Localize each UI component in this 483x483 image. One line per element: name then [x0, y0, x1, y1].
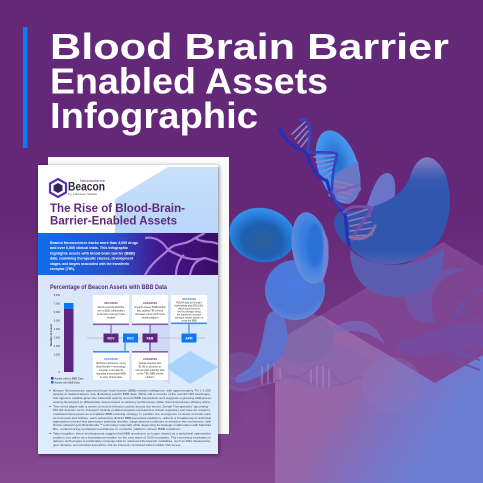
- illustration: blood cell behind DNA: [307, 125, 369, 209]
- timeline card: November top: form a $2B collaboration: [97, 310, 125, 312]
- timeline card: November top: 30/11/2025: [104, 301, 118, 305]
- timeline: [87, 323, 205, 351]
- bar chart: assets with and without BBB data: 4,000: [54, 328, 61, 331]
- report logo: Beacon: Neuroscience: [80, 179, 105, 183]
- timeline card: December bottom: program in its patients: [99, 369, 124, 372]
- back page sheet: [48, 157, 229, 434]
- report intro band: Beacon Neuroscience tracks more than 4,000 drugs: [50, 241, 138, 245]
- title: [50, 26, 449, 136]
- report key takeaways: this signal is notable given the historical opacity around BBB penetration and suggests a growing willingness: [53, 396, 211, 400]
- report intro band: data, examining therapeutic classes, development: [50, 256, 134, 260]
- left accent bar: [23, 27, 28, 148]
- timeline card: February top: therapies via its AOC brain: [135, 313, 165, 316]
- report key takeaways: assets) of tracked assets now disclosing explicit BBB data. While still a minority of the overall CNS landscape,: [53, 392, 211, 396]
- illustration: left blood cell: [224, 202, 300, 268]
- timeline chips: [104, 334, 196, 342]
- timeline card: December bottom: Biohaven advances, using: [96, 362, 126, 365]
- report key takeaways: as Kumquat and Kisbee, each advancing distinct BBB-penetrant platforms, reflects a broadening of technical: [53, 416, 211, 420]
- report intro band: highlights assets with blood-brain barrier (BBB): [50, 252, 136, 256]
- bar chart: assets with and without BBB data: Assets without BBB Data: [54, 376, 84, 380]
- report logo: Beacon: by Hanson Wade: [68, 192, 98, 196]
- timeline card: April top: cross the BBB: [181, 320, 197, 322]
- bar chart: assets with and without BBB data: Number of Assets: [49, 323, 53, 346]
- timeline card: April top: which could become: [178, 308, 200, 310]
- bar chart: assets with and without BBB data: 6,000: [54, 311, 61, 314]
- report key takeaways: Roche advancing its Brainshuttle™ technology internally while deepening its strategic collaboration with Manifold: [53, 423, 211, 427]
- timeline card: December bottom: [93, 351, 129, 380]
- timeline card: December bottom: 01/12/2025: [104, 357, 118, 361]
- report key takeaways: gene therapies, and cell-based approaches, that are inherently constrained without reliable CNS access.: [53, 443, 181, 447]
- report key takeaways: approaches beyond first generation antibody shuttles. Large pharma continues to reinforce this momentum, with: [53, 420, 211, 424]
- bar chart: assets with and without BBB data: [49, 294, 84, 384]
- report logo: Beacon: [50, 179, 105, 197]
- report title: [50, 201, 185, 227]
- timeline card: February top: Novartis closes $12B Avidity: [134, 306, 166, 309]
- timeline card: April top: the transferrin receptor: [177, 314, 201, 316]
- timeline card: November top: to develop next-gen brain: [97, 313, 126, 316]
- report key takeaways: [49, 388, 211, 447]
- report intro band: stages, and targets associated with the transferrin: [50, 262, 129, 266]
- timeline card: February bottom: Aliada acquired with: [139, 362, 162, 365]
- bar chart: assets with and without BBB data: Assets with BBB Data: [54, 380, 80, 384]
- report key takeaways: Bio, underscoring sustained confidence in modular, platform-driven BBB solutions.: [53, 427, 181, 431]
- timeline card: April top: 06/04/2026: [182, 297, 196, 301]
- report key takeaways: Taken together, these developments suggest that BBB crossing is no longer viewed as a peripheral optimization: [53, 432, 211, 436]
- report key takeaways: among developers to differentiate assets based on delivery performance rather than downstream efficacy alone.: [53, 400, 211, 404]
- report key takeaways: problem, but rather as a foundational enabler for the next wave of CNS innovation. The increasing emphasis on: [53, 435, 211, 439]
- timeline card: February top: shuttle platform: [141, 316, 159, 320]
- background: darker hexagonal panel: [321, 242, 483, 383]
- timeline card: April top: [171, 295, 207, 324]
- illustration: small blue lobe: [366, 173, 395, 208]
- illustration: large blue cell: [334, 157, 450, 264]
- bar chart: assets with and without BBB data: 8,000: [54, 294, 61, 297]
- timeline card: February top: [132, 295, 168, 325]
- report key takeaways: This trend aligns with a series of recent inflection points across the sector. Denali Therapeutics' upcoming: [53, 404, 208, 408]
- timeline card: April top: tividenofusp alfa (DNL310),: [175, 304, 204, 308]
- timeline card: December bottom: in early clinical data: [100, 376, 123, 379]
- timeline chips: NOV: [107, 336, 115, 340]
- timeline card: February bottom: on the TfR1 BBB shuttle: [137, 372, 164, 376]
- timeline card: November top: Roche and Manifold Bio: [98, 306, 125, 309]
- report intro band: receptor (TfR).: [50, 267, 75, 271]
- report intro band: [38, 233, 218, 275]
- timeline card: December bottom: signaling measurable BBB: [96, 372, 126, 376]
- report key takeaways: PDUFA decision for its Transport Vehicle-enabled program represents a critical regulatory test case for receptor-: [53, 408, 211, 412]
- timeline card: February top: 19/02/2026: [143, 301, 157, 305]
- illustration: DNA helix: [280, 119, 375, 245]
- illustration: tilted blood cell: [287, 210, 333, 286]
- timeline chips: DEC: [127, 336, 135, 340]
- bar chart: assets with and without BBB data: 0: [59, 371, 61, 374]
- title: Enabled Assets: [50, 60, 328, 102]
- timeline card: December bottom: BrainShuttle™ technology: [97, 366, 126, 368]
- title: Infographic: [50, 95, 258, 136]
- illustration: faded DNA on the right edge: [448, 290, 483, 370]
- illustration: lower blue cell: [265, 260, 325, 320]
- report intro band: and over 6,000 clinical trials. This infographic: [50, 246, 128, 250]
- timeline card: April top: transport vehicle system to: [175, 316, 204, 320]
- timeline card: February bottom: 24/02/2026: [143, 357, 157, 361]
- background: lighter hexagonal panel with blue fade: [275, 315, 483, 483]
- report key takeaways: mediated transcytosis as a scalable BBB-crossing strategy. In parallel, the emergence of newer entrants such: [53, 412, 211, 416]
- bar chart: assets with and without BBB data: 5,000: [54, 320, 61, 322]
- timeline card: November top: [93, 295, 129, 325]
- report header: [38, 165, 218, 233]
- chart heading: Percentage of Beacon Assets with BBB Data: [50, 285, 168, 291]
- timeline card: April top: the first therapy using: [178, 310, 201, 314]
- decorative diamond region: [150, 295, 218, 384]
- timeline chips: FEB: [147, 336, 154, 340]
- report page background: [38, 165, 218, 454]
- report logo: Beacon: Beacon: [68, 182, 105, 194]
- timeline chips: APR: [185, 336, 193, 340]
- timeline card: February top: buy, adding TfR1-linked: [137, 310, 164, 312]
- timeline card: February bottom: [132, 351, 168, 380]
- front page: report preview: [38, 165, 218, 454]
- report key takeaways: Beacon Neuroscience captured blood–brain barrier (BBB)-related intelligence, with approximately 7% (~1,000: [53, 388, 211, 392]
- report title: The Rise of Blood-Brain-: [50, 201, 185, 215]
- illustration: faded lower DNA strand: [230, 363, 361, 390]
- title: Blood Brain Barrier: [50, 26, 449, 67]
- timeline card: February bottom: $1.4B to advance an: [139, 366, 162, 368]
- timeline card: February bottom: anti-amyloid antibody built: [136, 369, 165, 372]
- timeline card: April top: PDUFA date for Denali's: [176, 302, 203, 304]
- bar chart: assets with and without BBB data: 2,000: [54, 345, 61, 348]
- bar chart: assets with and without BBB data: 7,000: [54, 302, 61, 306]
- report title: Barrier-Enabled Assets: [50, 213, 177, 227]
- illustration: translucent cell under large cell: [350, 248, 444, 297]
- bar chart: assets with and without BBB data: 1,000: [54, 354, 61, 356]
- illustration: lower translucent cells: [216, 268, 483, 428]
- timeline card: February bottom: platform: [145, 376, 155, 379]
- report key takeaways: delivery technologies is particularly consequential for advanced therapeutic modalities, such as RNA therapeutics,: [53, 439, 211, 443]
- bar chart: assets with and without BBB data: 3,000: [54, 336, 61, 340]
- timeline card: November top: shuttles: [107, 316, 116, 320]
